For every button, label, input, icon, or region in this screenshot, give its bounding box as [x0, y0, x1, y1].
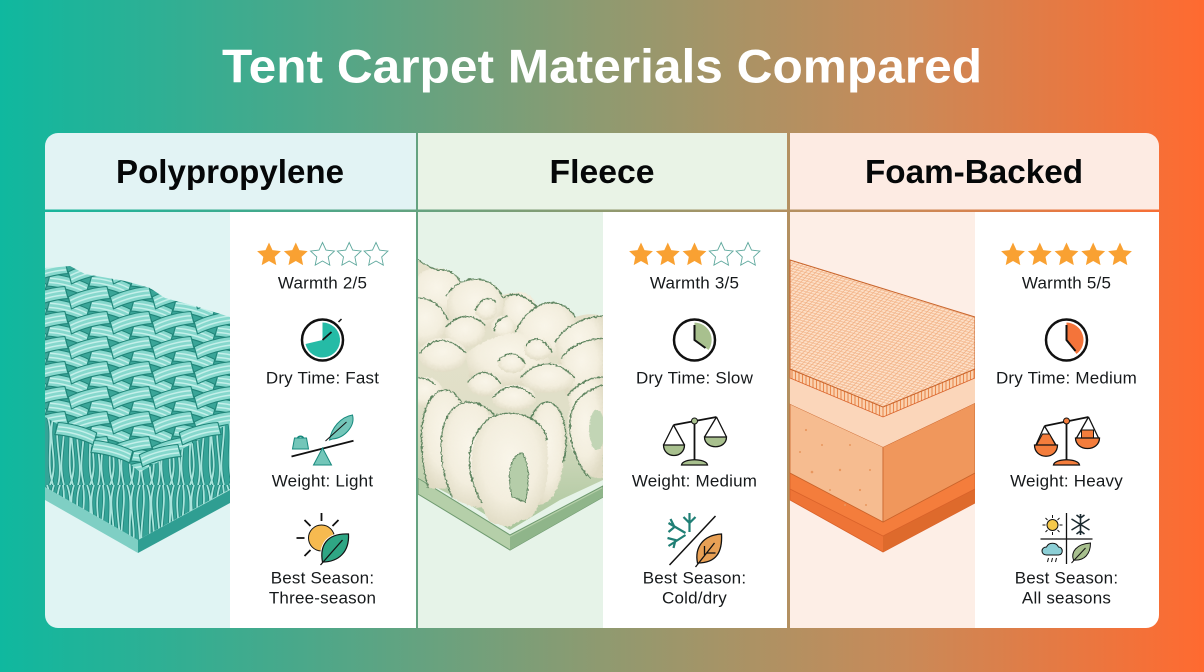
- warmth label: Warmth 3/5: [650, 274, 739, 292]
- icon: heavy scale: [1034, 417, 1100, 465]
- icon: clock medium: [1046, 320, 1087, 360]
- panel: polypropylene: [45, 133, 416, 628]
- icon: balanced scale: [664, 417, 726, 465]
- illustration: fleece carpet: [402, 212, 605, 628]
- comparison card: [45, 133, 1159, 628]
- best season label: Best Season:: [1015, 568, 1118, 588]
- icon: clock slow: [674, 320, 715, 360]
- dry time label: Dry Time: Slow: [636, 368, 754, 388]
- heading: foam-backed: [790, 133, 1159, 210]
- best season label: [1016, 572, 1117, 604]
- heading: fleece: Fleece: [550, 153, 654, 190]
- stats: foam-backed: [975, 212, 1159, 628]
- title: Tent Carpet Materials Compared: [222, 40, 982, 94]
- heading: polypropylene: [45, 133, 416, 210]
- warmth label: Warmth 5/5: [1022, 274, 1111, 292]
- dry time label: Dry Time: Fast: [266, 368, 379, 388]
- icon: seesaw with feather: [292, 415, 354, 465]
- best season label: Best Season:: [643, 568, 746, 588]
- weight label: Weight: Heavy: [1010, 472, 1123, 490]
- weight label: Weight: Light: [272, 472, 373, 490]
- best season label: Three-season: [269, 588, 376, 608]
- icon: snowflake and leaf: [668, 513, 722, 567]
- dry time label: Dry Time: Medium: [996, 368, 1137, 388]
- icon: sun and leaf: [296, 513, 349, 565]
- best season label: [269, 572, 375, 604]
- best season label: All seasons: [1022, 588, 1111, 608]
- illustration: woven polypropylene carpet: [45, 212, 230, 628]
- warmth stars 5 of 5: [1001, 242, 1132, 265]
- heading: foam-backed: Foam-Backed: [865, 153, 1083, 190]
- heading: polypropylene: Polypropylene: [116, 153, 344, 190]
- panel: foam-backed: [790, 133, 1159, 628]
- weight label: Weight: Medium: [632, 472, 757, 490]
- warmth stars 3 of 5: [629, 242, 760, 265]
- illustration: foam-backed carpet layers: [790, 212, 975, 628]
- stats: fleece: [603, 212, 787, 628]
- warmth label: Warmth 2/5: [278, 274, 367, 292]
- icon: stopwatch: [302, 319, 343, 360]
- panel: fleece: [402, 133, 787, 628]
- stats: polypropylene: [230, 212, 416, 628]
- warmth stars 2 of 5: [257, 242, 388, 265]
- heading: fleece: [418, 133, 787, 210]
- best season label: [644, 572, 745, 607]
- best season label: Cold/dry: [662, 588, 727, 608]
- best season label: Best Season:: [271, 568, 374, 588]
- icon: four seasons grid: [1040, 513, 1092, 564]
